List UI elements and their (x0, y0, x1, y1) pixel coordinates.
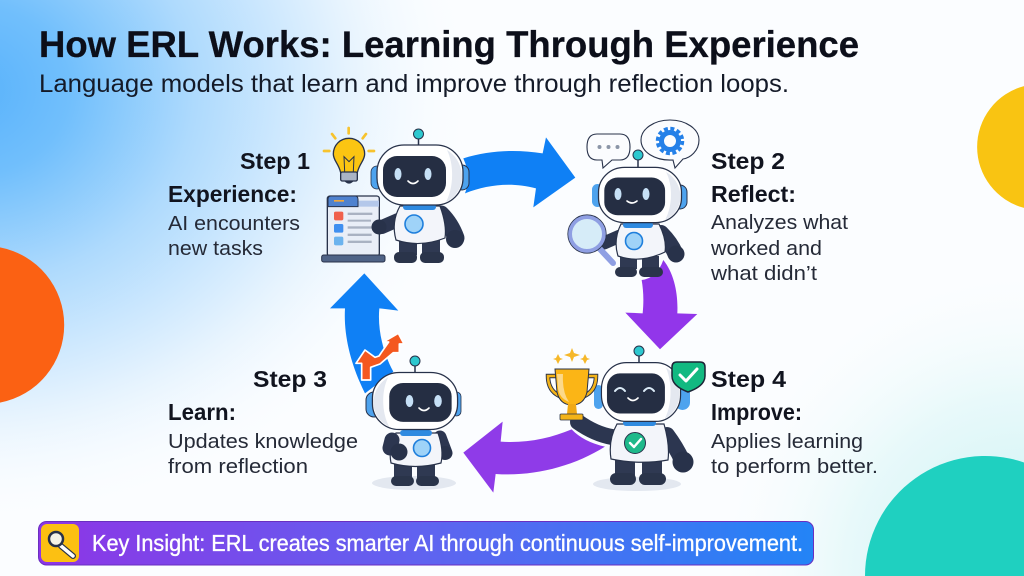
robot 2 (568, 120, 699, 277)
text block: step 1: AI encounters (168, 212, 300, 235)
robot 3 (366, 356, 461, 490)
text block: step 1: new tasks (168, 237, 263, 260)
icon: task panel (322, 196, 385, 262)
text block: step 4: Applies learning (711, 430, 863, 453)
text block: step 2 (710, 148, 848, 285)
icon: speech bubble with gear (641, 120, 699, 168)
robot 4 (548, 346, 705, 491)
text block: step 3: Updates knowledge (168, 430, 358, 453)
icon: magnifier badge (41, 524, 79, 562)
decorative circle: orange (0, 247, 64, 403)
subtitle: Language models that learn and improve through reflection loops. (39, 70, 789, 98)
text block: step 2: what didn’t (710, 262, 817, 285)
text block: step 3: Learn: (168, 399, 236, 425)
text block: step 4: Step 4 (711, 366, 786, 392)
arrow: step 1 to step 2 (463, 137, 575, 207)
icon: light bulb (324, 128, 374, 184)
text block: step 2: Step 2 (711, 148, 785, 174)
text block: step 1 (168, 148, 310, 260)
arrow: step 3 to step 1 (330, 273, 398, 393)
text block: step 3: Step 3 (253, 366, 327, 392)
text block: step 2: worked and (710, 237, 822, 260)
text block: step 2: Reflect: (711, 181, 796, 207)
icon: speech bubble with dots (587, 134, 630, 168)
text block: step 3: from reflection (168, 455, 308, 478)
title: How ERL Works: Learning Through Experience (39, 24, 859, 65)
text block: step 4 (711, 366, 878, 478)
decorative circle: teal (865, 456, 1024, 576)
callout text: Key Insight: ERL creates smarter AI through continuous self-improvement. (92, 530, 803, 556)
icon: growth arrow (356, 333, 404, 380)
robot 1 (371, 129, 469, 263)
callout: key insight bar (38, 522, 814, 565)
icon: trophy (548, 348, 596, 420)
text block: step 2: Analyzes what (711, 211, 848, 234)
text block: step 4: to perform better. (711, 455, 878, 478)
icon: magnifying glass (568, 215, 613, 263)
text block: step 1: Step 1 (240, 148, 310, 174)
icon: check badge (672, 362, 705, 392)
text block: step 1: Experience: (168, 181, 297, 207)
arrow: step 4 to step 3 (463, 422, 605, 493)
text block: step 4: Improve: (711, 399, 802, 425)
arrow: step 2 to step 4 (625, 260, 697, 349)
text block: step 3 (168, 366, 358, 478)
decorative circle: yellow (977, 86, 1024, 208)
